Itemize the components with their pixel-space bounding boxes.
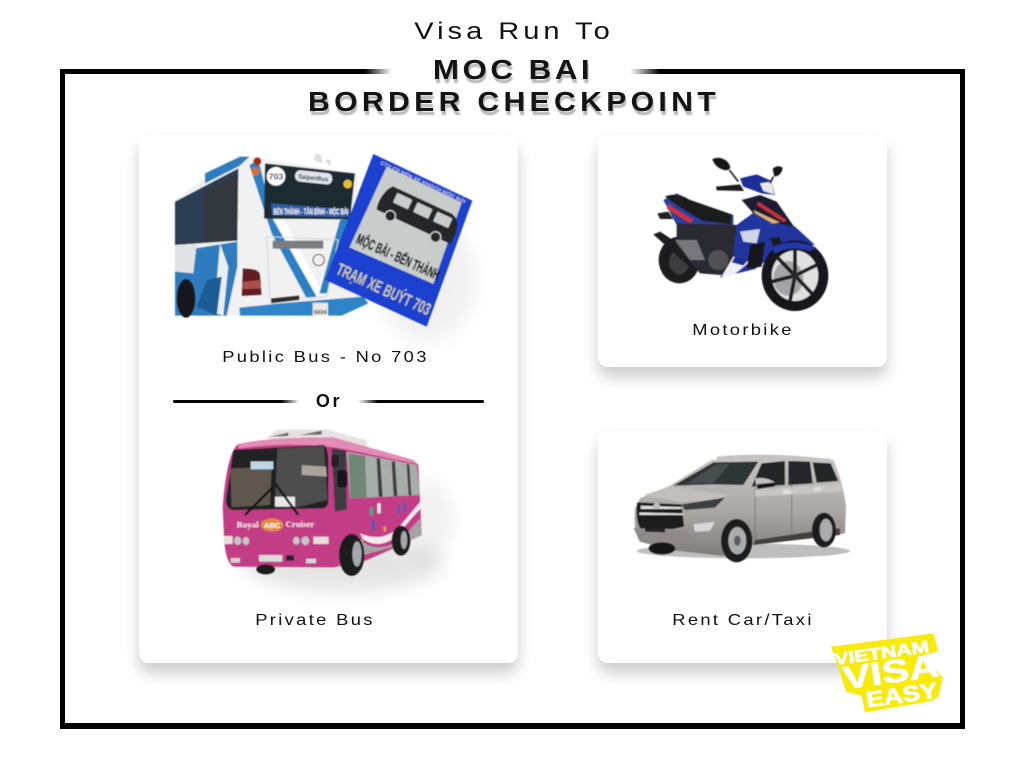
panel: rent car / taxi (598, 431, 887, 663)
logo: Vietnam Visa Easy: VIETNAM (833, 637, 930, 669)
label: motorbike: Motorbike (692, 322, 794, 339)
illustration: silver MPV (633, 454, 850, 564)
panel: buses (139, 135, 518, 663)
frame gap fade (365, 67, 660, 76)
label: rent car: Rent Car/Taxi (672, 612, 814, 629)
title line two: BORDER CHECKPOINT (308, 86, 720, 117)
title kicker: Visa Run To (414, 18, 614, 45)
illustration: public bus 703 and stop sign: 5024 (314, 310, 327, 316)
illustration: public bus 703 and stop sign: CTY CP BẾN XE KHÁCH MỘC BÀI (379, 159, 468, 206)
title line one: MOC BAI (433, 54, 593, 85)
illustration: public bus 703 and stop sign: 703 (269, 171, 284, 181)
illustration: pink private bus (222, 429, 450, 596)
illustration: motorbike (653, 157, 830, 312)
logo: Vietnam Visa Easy: EASY (865, 678, 939, 712)
divider right (358, 400, 484, 403)
illustration: pink private bus: ABC (264, 521, 281, 530)
logo: Vietnam Visa Easy: VISA (841, 647, 941, 696)
outer frame (60, 69, 965, 729)
illustration: public bus 703 and stop sign: BẾN THÀNH - TÂN BÌNH - MỘC BÀI (273, 207, 348, 217)
label: public bus: Public Bus - No 703 (222, 349, 429, 366)
illustration: public bus 703 and stop sign: SaipenBus (298, 173, 329, 184)
illustration: pink private bus: Cruiser (286, 519, 314, 529)
illustration: public bus 703 and stop sign: TRẠM XE BUÝT 703 (333, 259, 434, 319)
illustration: pink private bus: Royal (237, 520, 259, 530)
or label: Or (316, 391, 342, 411)
logo: Vietnam Visa Easy (831, 633, 943, 712)
panel: motorbike (598, 135, 887, 367)
illustration: public bus 703 and stop sign (174, 154, 473, 339)
label: private bus: Private Bus (255, 612, 375, 629)
illustration: public bus 703 and stop sign: MỘC BÀI - BẾN THÀNH (353, 230, 443, 284)
divider left (173, 400, 299, 403)
